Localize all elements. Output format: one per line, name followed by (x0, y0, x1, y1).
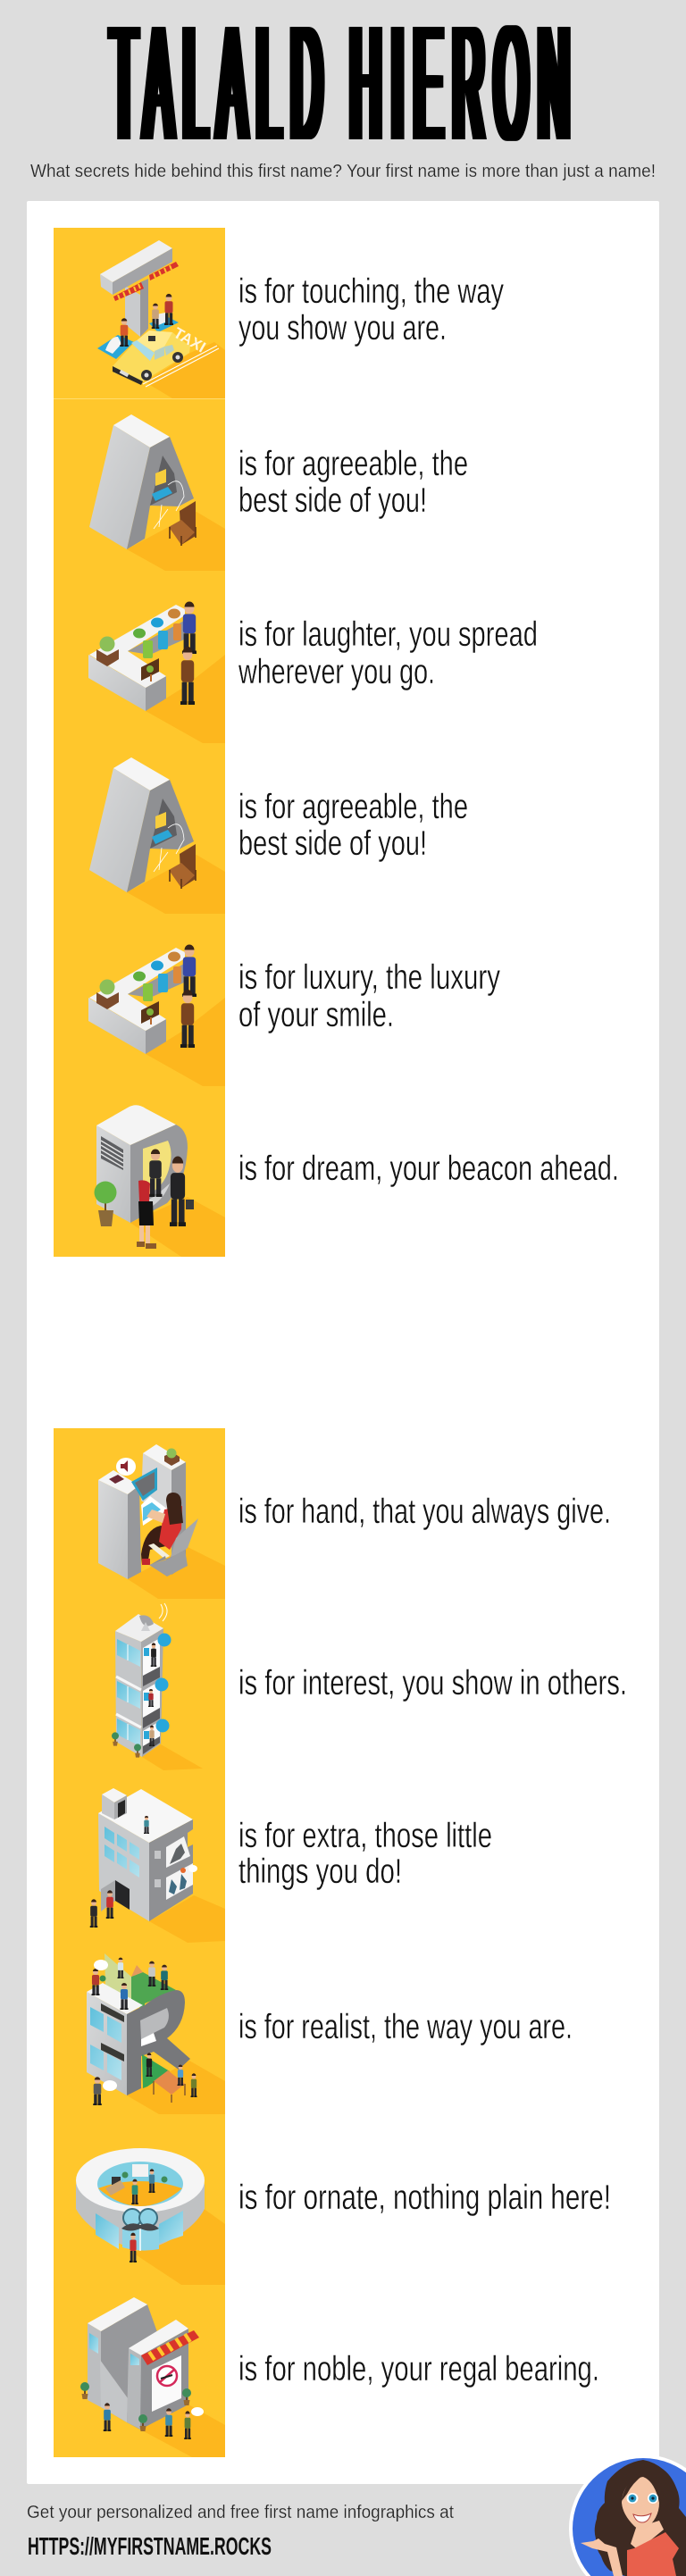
row text 3: is for laughter, you spread (238, 615, 538, 654)
row text 5 (238, 958, 500, 1034)
row text 1: is for touching, the way (238, 272, 504, 311)
row text 2: is for agreeable, the (238, 445, 468, 483)
row text 1 (238, 272, 504, 347)
row text 4: is for agreeable, the (238, 788, 468, 826)
row text 9: is for extra, those little (238, 1817, 492, 1855)
icon: letter T taxi stand (97, 240, 225, 398)
avatar: cartoon woman (569, 2455, 686, 2576)
icon: letter A repeated (89, 757, 225, 914)
taxi car (113, 330, 190, 385)
footer text: Get your personalized and free first name infographics at (27, 2502, 454, 2522)
icon: letter H office desk (98, 1444, 225, 1599)
icon: letter I apartment tower (112, 1603, 203, 1770)
row text 4: best side of you! (238, 824, 427, 863)
subtitle: What secrets hide behind this first name? Your first name is more than just a name! (30, 161, 656, 181)
icon: letter L repeated (88, 945, 225, 1086)
panel: yellow image column bottom (54, 1428, 225, 2457)
row text 4 (238, 788, 468, 863)
row text 9: things you do! (238, 1853, 402, 1891)
icon: letter N no smoking shop (80, 2297, 225, 2457)
row text 3 (238, 615, 538, 691)
row text 5: of your smile. (238, 996, 394, 1034)
row text 9 (238, 1817, 492, 1891)
panel: yellow image column top (54, 228, 225, 1257)
icon: letter E office building (90, 1788, 225, 1943)
icon: letter L recycling station (88, 602, 225, 743)
row text 2: best side of you! (238, 481, 427, 520)
row text 3: wherever you go. (238, 653, 435, 691)
icon: letter D with business people (95, 1105, 225, 1257)
icon: letter A with chair (89, 414, 225, 571)
row text 1: you show you are. (238, 309, 447, 347)
row text 2 (238, 445, 468, 520)
row text 5: is for luxury, the luxury (238, 958, 500, 997)
icon: letter O optician ring (76, 2148, 225, 2285)
row text 10: is for realist, the way you are. (238, 2008, 573, 2046)
footer url: HTTPS://MYFIRSTNAME.ROCKS (28, 2532, 272, 2560)
icon: letter T taxi stand: TAXI (171, 324, 208, 355)
icon: letter R green terrace building (87, 1953, 225, 2114)
